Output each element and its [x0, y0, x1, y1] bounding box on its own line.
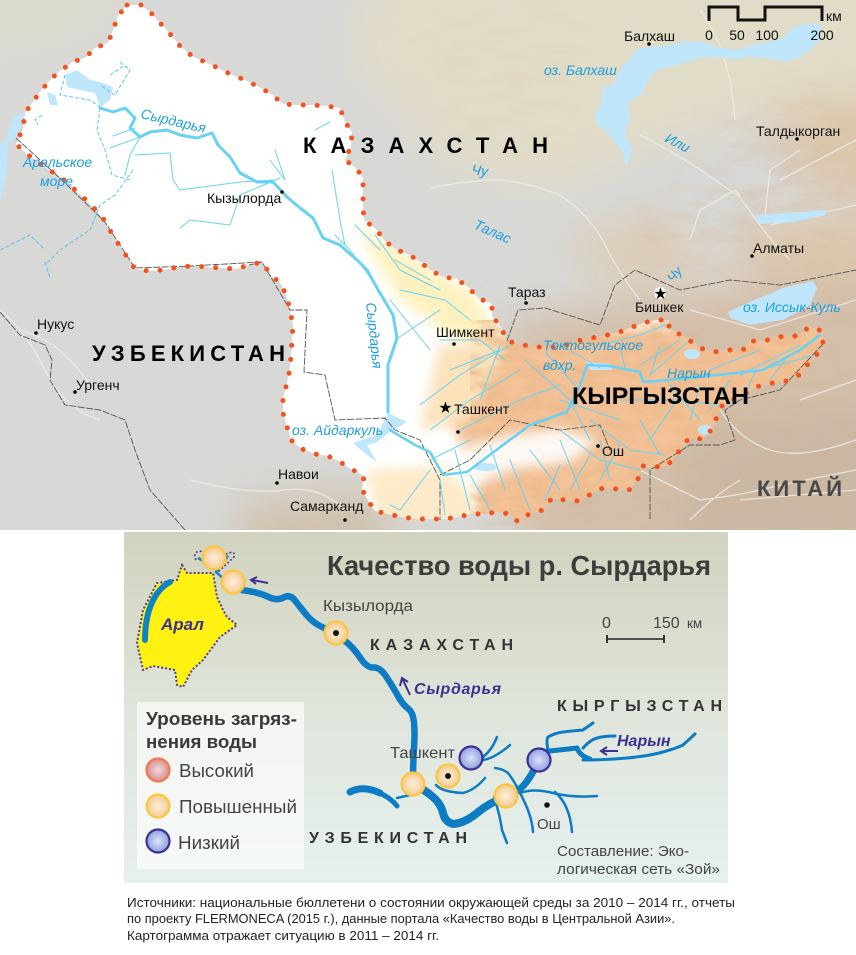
city labels and markers: Талдыкорган [756, 123, 840, 139]
map scale bar [705, 7, 842, 43]
inset labels: Кызылорда [323, 598, 413, 615]
city labels and markers: Ош [602, 443, 624, 459]
legend: Повышенный [179, 797, 297, 817]
Kapchagay reservoir [754, 210, 827, 224]
inset labels: КЫРГЫЗСТАН [557, 698, 722, 715]
inset title: Качество воды р. Сырдарья [327, 550, 711, 581]
map scale bar: 0 [705, 27, 713, 43]
river and lake labels on map [22, 62, 841, 438]
lake Balkhash [595, 23, 822, 167]
city labels and markers: ★ [654, 286, 667, 301]
river and lake labels on map: Токтогульское [543, 337, 643, 353]
river and lake labels on map: Аральское [22, 154, 92, 170]
city labels and markers: Кызылорда [207, 190, 281, 206]
Aral area [137, 551, 237, 687]
inset labels: логическая сеть «Зой» [557, 862, 720, 878]
river and lake labels on map: вдхр. [543, 357, 576, 373]
river and lake labels on map: оз. Иссык-Куль [743, 299, 841, 315]
sources note [127, 896, 735, 943]
basin boundary dots [16, 5, 823, 522]
city labels and markers: Ургенч [76, 377, 120, 393]
city labels and markers: Шимкент [436, 324, 495, 340]
river and lake labels on map: Сырдарья [139, 105, 208, 136]
legend: Уровень загряз- [146, 709, 297, 729]
map scale bar: 100 [755, 27, 779, 43]
legend: нения воды [146, 732, 257, 752]
inset labels: УЗБЕКИСТАН [309, 830, 467, 847]
Toktogul reservoir [587, 362, 612, 370]
inset scale bar: 150 [653, 615, 680, 632]
city labels and markers: ★ [439, 400, 452, 415]
river and lake labels on map: Чу [471, 161, 490, 179]
river and lake labels on map: Сырдарья [363, 302, 386, 370]
river and lake labels on map: море [40, 173, 73, 189]
river and lake labels on map: Нарын [667, 365, 711, 381]
water bodies [0, 23, 827, 471]
sources note: по проекту FLERMONECA (2015 г.), данные портала «Качество воды в Центральной Азии». [127, 912, 675, 926]
country borders [0, 138, 856, 530]
inset labels [309, 598, 722, 878]
sources note: Картограмма отражает ситуацию в 2011 – 2014 гг. [127, 929, 439, 943]
panel: relief map of the Syr Darya basin [0, 0, 856, 570]
river and lake labels on map: Талас [472, 216, 514, 246]
city labels and markers: Алматы [753, 240, 804, 256]
river and lake labels on map: Или [663, 130, 693, 156]
inset labels: Ташкент [390, 745, 456, 762]
dashed dry channels [0, 62, 133, 278]
North Aral lake [65, 70, 113, 107]
main channel [100, 108, 397, 412]
inset labels: Нарын [617, 733, 671, 750]
Aral Sea [0, 113, 25, 200]
basin area [0, 0, 856, 530]
river and lake labels on map: Чу [664, 262, 686, 285]
monitoring points [202, 546, 550, 808]
country labels on map: УЗБЕКИСТАН [92, 341, 285, 366]
city labels and markers: Тараз [508, 284, 546, 300]
panel: water quality inset map [124, 532, 728, 883]
lake Aidarkul [353, 413, 407, 462]
inset labels: Составление: Эко- [557, 844, 689, 860]
inset scale bar [602, 615, 702, 643]
inset scale bar: 0 [602, 615, 611, 632]
city labels and markers [34, 28, 840, 522]
sources note: Источники: национальные бюллетени о состоянии окружающей среды за 2010 – 2014 гг., отчеты [127, 896, 735, 910]
city labels and markers: Самарканд [290, 498, 363, 514]
city labels and markers: Балхаш [624, 28, 675, 44]
map scale bar: 200 [810, 27, 834, 43]
river and lake labels on map: оз. Балхаш [544, 62, 617, 78]
flow arrows [251, 577, 618, 755]
Syr Darya and tributaries [100, 108, 820, 515]
city labels and markers: Бишкек [635, 299, 684, 315]
inset scale bar: км [687, 616, 702, 631]
light background rivers [0, 10, 856, 520]
legend: Высокий [179, 761, 254, 781]
city labels and markers: Ташкент [454, 401, 510, 417]
country labels on map: КИТАЙ [757, 476, 842, 501]
legend [137, 702, 304, 869]
lake Issyk-Kul [728, 281, 817, 325]
inset labels: Сырдарья [414, 681, 502, 698]
country labels on map [92, 133, 842, 501]
inset labels: Ош [537, 816, 561, 833]
map scale bar: км [826, 8, 842, 24]
terrain relief [224, 0, 856, 530]
legend: Низкий [178, 833, 240, 853]
country labels on map: КАЗАХСТАН [303, 133, 548, 158]
Son-Kul and others [684, 349, 700, 359]
country labels on map: КЫРГЫЗСТАН [572, 383, 749, 410]
river and lake labels on map: оз. Айдаркуль [292, 422, 383, 438]
city labels and markers: Навои [278, 466, 319, 482]
Syr Darya river course [242, 590, 695, 843]
map scale bar: 50 [729, 27, 745, 43]
Aral label: Арал [160, 615, 204, 634]
city labels and markers: Нукус [37, 316, 74, 332]
inset labels: КАЗАХСТАН [370, 637, 513, 654]
